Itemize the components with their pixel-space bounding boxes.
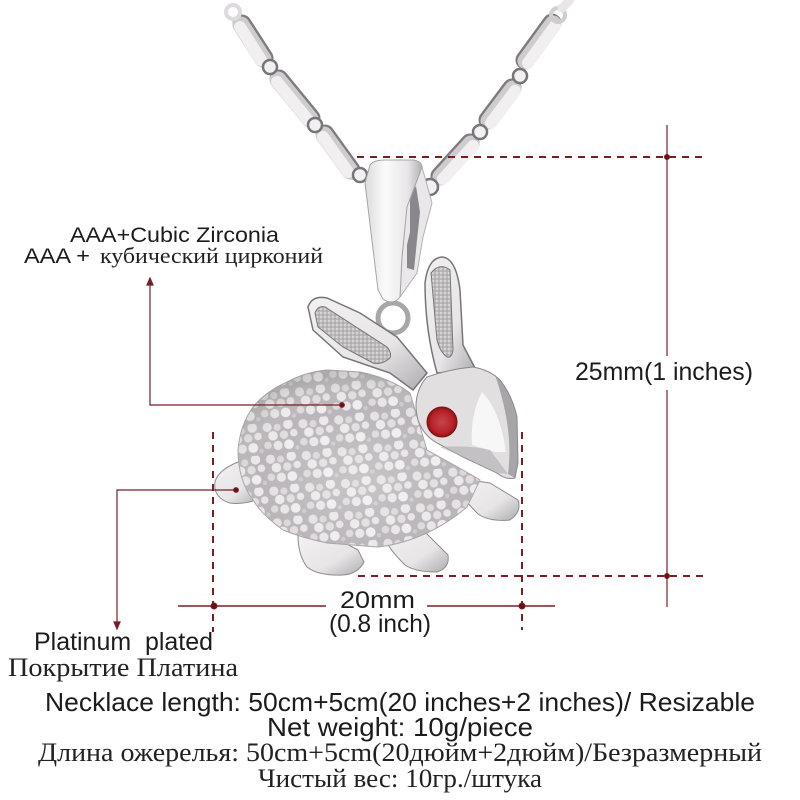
specifications text: Necklace length: 50cm+5cm(20 inches+2 inches)/ Resizable <box>45 687 755 717</box>
annotation: cubic zirconia leader <box>147 278 344 407</box>
head shadow <box>495 375 518 478</box>
pendant: rabbit <box>215 160 519 575</box>
specifications text <box>38 687 762 793</box>
label: height: 25mm(1 inches) <box>575 358 753 386</box>
label: cubic zirconia <box>24 224 323 268</box>
right ear <box>425 257 476 373</box>
lower face band <box>440 446 508 474</box>
label: cubic zirconia: AAA + <box>24 245 90 268</box>
body shading <box>238 370 480 547</box>
label: width: (0.8 inch) <box>329 610 431 638</box>
chain: right strand <box>422 0 570 195</box>
bail front <box>365 160 422 302</box>
specifications text: Длина ожерелья: 50cm+5cm(20дюйм+2дюйм)/Безразмерный <box>38 738 762 767</box>
front leg upper <box>460 480 519 520</box>
front leg lower <box>387 530 448 572</box>
specifications text: Чистый вес: 10гр./штука <box>258 764 542 793</box>
label: width <box>329 587 431 638</box>
annotation: platinum leader <box>114 488 238 629</box>
specifications text: Net weight: 10g/piece <box>267 712 533 742</box>
label: cubic zirconia: AAA+Cubic Zirconia <box>70 224 279 247</box>
bail interior dark <box>407 186 420 270</box>
head highlight <box>472 392 506 452</box>
hind foot <box>215 462 262 503</box>
label: platinum plated <box>8 628 238 682</box>
pave body <box>238 370 480 547</box>
dimension: height 25mm <box>357 125 706 607</box>
rear leg <box>298 535 364 575</box>
label: platinum plated: Покрытие Платина <box>8 653 238 682</box>
left ear <box>308 297 427 390</box>
label: width: 20mm <box>340 587 415 614</box>
label: cubic zirconia: кубический цирконий <box>100 243 323 268</box>
chain: left strand <box>226 5 367 182</box>
jump ring <box>378 303 408 333</box>
dimension: width 20mm <box>178 432 555 632</box>
bail back <box>400 167 432 297</box>
head <box>416 367 518 478</box>
eye <box>427 407 457 437</box>
label: platinum plated: Platinum plated <box>34 628 213 656</box>
